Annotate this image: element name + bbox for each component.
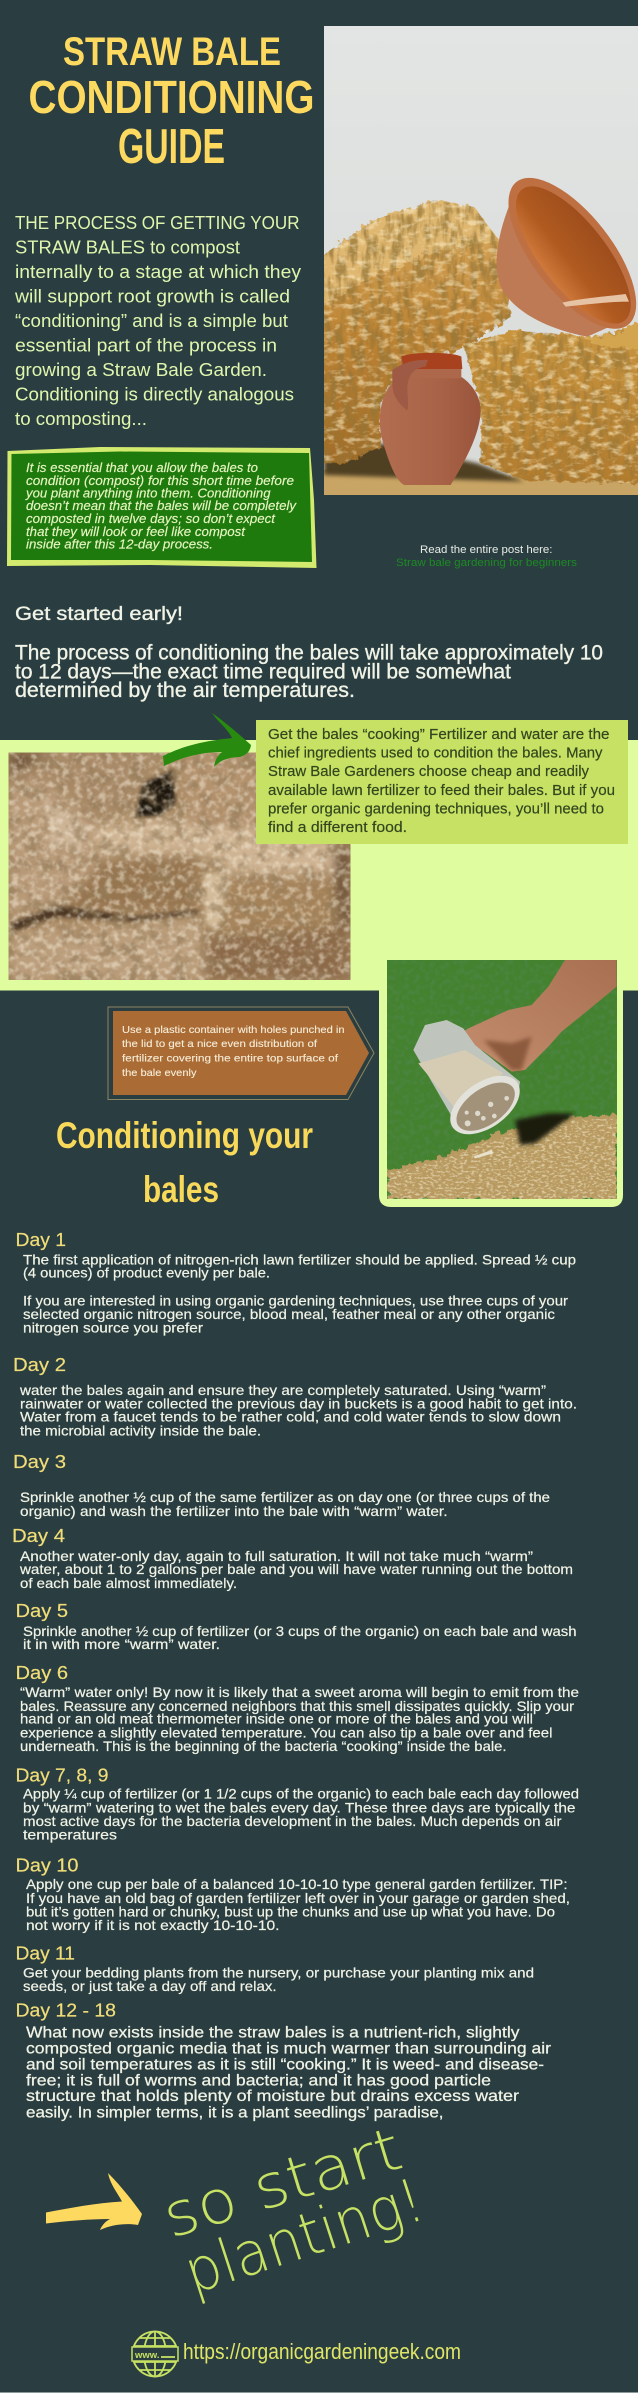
day 10: If you have an old bag of garden fertilizer left over in your garage or garden shed,	[26, 1890, 570, 1906]
day 2: Day 2	[13, 1354, 66, 1375]
callout: essential note: you plant anything into them. Conditioning	[25, 486, 271, 500]
text box: get the bales cooking: Straw Bale Gardeners choose cheap and readily	[268, 763, 589, 780]
callout: essential note: It is essential that you allow the bales to	[26, 460, 258, 475]
callout: essential note	[7, 447, 316, 568]
day 6: underneath. This is the beginning of the bacteria “cooking” inside the bale.	[20, 1738, 506, 1754]
day 2	[13, 1354, 577, 1438]
text block: timing: determined by the air temperatures.	[15, 679, 355, 702]
day 4	[12, 1525, 573, 1591]
text box: get the bales cooking	[256, 720, 628, 844]
text block: timing	[15, 642, 603, 702]
text box: get the bales cooking: find a different food.	[268, 819, 407, 836]
title: CONDITIONING	[28, 71, 314, 123]
photo: straw bales with terracotta pots	[321, 26, 638, 498]
day 12 - 18: What now exists inside the straw bales is a nutrient-rich, slightly	[26, 2024, 520, 2042]
callout: essential note: composted in twelve days; so don’t expect	[26, 511, 276, 526]
callout: essential note: condition (compost) for this short time before	[26, 473, 294, 488]
day 7, 8, 9: most active days for the bacteria development in the bales. Much depends on air	[23, 1813, 562, 1829]
callout: brown arrow tip	[108, 1007, 374, 1100]
photo: stacked hay bales	[8, 752, 351, 980]
text box: get the bales cooking: chief ingredients used to condition the bales. Many	[268, 744, 603, 762]
day 12 - 18: structure that holds plenty of moisture but drains excess water	[26, 2088, 520, 2105]
day 11	[16, 1942, 534, 1994]
day 10: Day 10	[16, 1854, 78, 1876]
slogan: so start planting	[155, 2114, 433, 2308]
slogan: so start planting: planting!	[176, 2165, 433, 2308]
day 3: Day 3	[13, 1451, 66, 1472]
day 12 - 18: easily. In simpler terms, it is a plant seedlings’ paradise,	[26, 2104, 444, 2122]
intro paragraph: growing a Straw Bale Garden.	[15, 359, 267, 380]
source link	[396, 544, 578, 569]
website url: https://organicgardeningeek.com	[183, 2339, 461, 2364]
heading: conditioning your bales: bales	[143, 1169, 219, 1210]
day 12 - 18: free; it is full of worms and bacteria; and it has good particle	[26, 2072, 491, 2090]
day 6: “Warm” water only! By now it is likely that a sweet aroma will begin to emit from the	[20, 1684, 579, 1700]
source link: Read the entire post here:	[420, 544, 552, 556]
day 4: Another water-only day, again to full saturation. It will not take much “warm”	[20, 1548, 533, 1564]
day 11: Day 11	[16, 1942, 75, 1964]
callout: essential note: doesn’t mean that the bales will be completely	[26, 498, 298, 513]
day 7, 8, 9: by “warm” watering to wet the bales every day. These three days are typically the	[23, 1800, 576, 1816]
day 10	[16, 1854, 570, 1933]
callout: essential note: that they will look or feel like compost	[26, 524, 246, 539]
text box: get the bales cooking: Get the bales “cooking” Fertilizer and water are the	[268, 726, 610, 743]
day 10: Apply one cup per bale of a balanced 10-10-10 type general garden fertilizer. TIP:	[26, 1876, 568, 1892]
day 12 - 18: Day 12 - 18	[16, 2000, 116, 2020]
callout: brown arrow tip: the bale evenly	[122, 1067, 197, 1079]
day 5: Sprinkle another ½ cup of fertilizer (or 3 cups of the organic) on each bale and wash	[23, 1623, 576, 1639]
day 2: Water from a faucet tends to be rather cold, and cold water tends to slow down	[20, 1408, 561, 1424]
day 7, 8, 9: Apply ¼ cup of fertilizer (or 1 1/2 cups of the organic) to each bale each day followed	[23, 1786, 579, 1802]
intro paragraph: essential part of the process in	[15, 334, 277, 356]
day 4: Day 4	[12, 1525, 65, 1546]
day 1: (4 ounces) of product evenly per bale.	[23, 1264, 270, 1280]
panel: photo frame	[379, 959, 623, 1207]
day 1	[16, 1229, 576, 1336]
day 4: of each bale almost immediately.	[20, 1575, 237, 1591]
day 1: The first application of nitrogen-rich lawn fertilizer should be applied. Spread ½ cup	[23, 1252, 576, 1268]
day 1: selected organic nitrogen source, blood meal, feather meal or any other organic	[23, 1306, 555, 1322]
intro paragraph: STRAW BALES to compost	[15, 236, 240, 258]
text block: timing: The process of conditioning the bales will take approximately 10	[15, 642, 603, 664]
heading: get started early: Get started early!	[15, 604, 183, 625]
day 12 - 18: and soil temperatures as it is still “cooking.” It is weed- and disease-	[26, 2056, 544, 2074]
icon: globe www: www.	[134, 2350, 159, 2361]
day 7, 8, 9: temperatures	[23, 1826, 117, 1842]
day 2: the microbial activity inside the bale.	[20, 1422, 261, 1438]
title: STRAW BALE	[63, 30, 281, 74]
day 12 - 18	[16, 2000, 552, 2122]
photo: hand sprinkling fertilizer from a container	[387, 960, 617, 1199]
source link: Straw bale gardening for beginners	[396, 557, 578, 569]
day 3: organic) and wash the fertilizer into the bale with “warm” water.	[20, 1503, 448, 1519]
day 2: rainwater or water collected the previous day in buckets is a good habit to get into.	[20, 1396, 577, 1412]
day 6	[16, 1662, 579, 1754]
day 3	[13, 1451, 550, 1519]
intro paragraph: internally to a stage at which they	[15, 261, 302, 282]
day 12 - 18: composted organic media that is much warmer than surrounding air	[26, 2040, 552, 2058]
day 10: not worry if it is not exactly 10-10-10.	[26, 1917, 280, 1933]
title	[28, 30, 314, 174]
day 7, 8, 9: Day 7, 8, 9	[16, 1764, 108, 1786]
day 5: it in with more “warm” water.	[23, 1636, 220, 1652]
text box: get the bales cooking: available lawn fertilizer to feed their bales. But if you	[268, 782, 615, 799]
intro paragraph: to composting...	[15, 408, 147, 429]
intro paragraph	[14, 212, 302, 429]
day 6: hand or an old meat thermometer inside one or more of the bales and you will	[20, 1710, 533, 1726]
slogan: so start planting: so start	[155, 2114, 410, 2252]
day 2: water the bales again and ensure they are completely saturated. Using “warm”	[19, 1382, 546, 1398]
callout: essential note: inside after this 12-day process.	[26, 536, 213, 552]
day 11: seeds, or just take a day off and relax.	[23, 1978, 276, 1994]
day 1: If you are interested in using organic gardening techniques, use three cups of your	[23, 1292, 568, 1308]
text box: get the bales cooking: prefer organic gardening techniques, you’ll need to	[268, 800, 604, 818]
day 6: experience a slightly elevated temperature. You can also tip a bale over and feel	[20, 1724, 552, 1740]
panel: lime band	[0, 740, 638, 990]
intro paragraph: Conditioning is directly analogous	[15, 384, 294, 404]
heading: conditioning your bales	[56, 1115, 313, 1210]
callout: brown arrow tip: fertilizer covering the entire top surface of	[122, 1052, 338, 1064]
day 3: Sprinkle another ½ cup of the same fertilizer as on day one (or three cups of the	[20, 1489, 550, 1505]
arrow: green	[163, 713, 251, 767]
day 6: bales. Reassure any concerned neighbors that this smell dissipates quickly. Slip your	[20, 1698, 574, 1714]
text block: timing: to 12 days—the exact time required will be somewhat	[15, 660, 511, 684]
day 1: nitrogen source you prefer	[23, 1320, 203, 1336]
icon: globe www	[132, 2332, 178, 2376]
day 11: Get your bedding plants from the nursery, or purchase your planting mix and	[23, 1964, 534, 1980]
day 4: water, about 1 to 2 gallons per bale and you will have water running out the bottom	[19, 1561, 573, 1577]
day 6: Day 6	[16, 1662, 68, 1683]
title: GUIDE	[118, 120, 225, 174]
callout: brown arrow tip: Use a plastic container with holes punched in	[122, 1024, 345, 1036]
arrow: yellow	[46, 2173, 142, 2230]
day 1: Day 1	[16, 1229, 66, 1250]
heading: conditioning your bales: Conditioning your	[56, 1115, 313, 1156]
intro paragraph: THE PROCESS OF GETTING YOUR	[15, 212, 300, 233]
day 7, 8, 9	[16, 1764, 579, 1842]
day 10: but it’s gotten hard or chunky, bust up the chunks and use up what you have. Do	[26, 1904, 555, 1920]
intro paragraph: will support root growth is called	[14, 286, 290, 306]
callout: brown arrow tip: the lid to get a nice even distribution of	[122, 1038, 317, 1050]
day 5	[16, 1600, 576, 1652]
intro paragraph: “conditioning” and is a simple but	[15, 310, 288, 331]
day 5: Day 5	[16, 1600, 68, 1621]
